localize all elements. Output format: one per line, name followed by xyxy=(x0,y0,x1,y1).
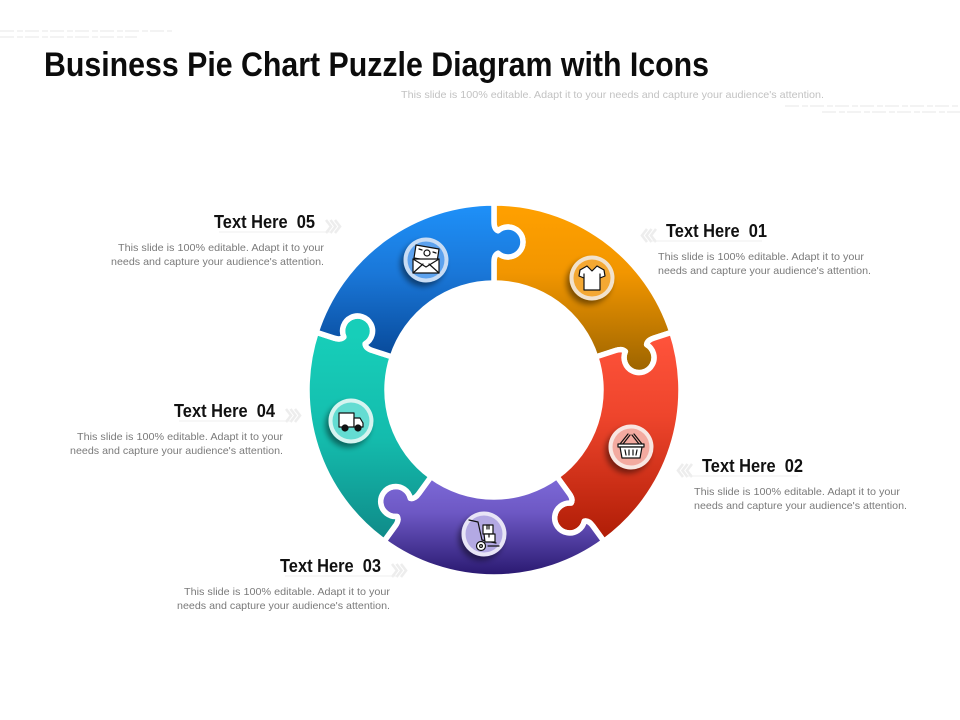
chevrons 05 xyxy=(326,220,340,233)
text block 05: needs and capture your audience's attention. xyxy=(111,256,324,268)
icon badge: t-shirt xyxy=(570,256,614,300)
chevrons 04 xyxy=(286,409,300,422)
chevrons 01 xyxy=(642,229,656,242)
text block 03: needs and capture your audience's attention. xyxy=(177,600,390,612)
puzzle piece 05 blue xyxy=(316,163,532,385)
puzzle piece 01 orange xyxy=(494,203,672,373)
text block 02: This slide is 100% editable. Adapt it to your xyxy=(694,486,901,498)
puzzle ring chart xyxy=(240,163,727,646)
text block 04: Text Here 04 xyxy=(174,401,275,421)
text block 03 xyxy=(177,556,406,612)
icon badge: delivery truck xyxy=(328,398,374,444)
icon badge: shopping basket xyxy=(608,424,654,470)
text block 04: This slide is 100% editable. Adapt it to your xyxy=(77,431,284,443)
icon badge: money envelope xyxy=(404,238,448,282)
text block 03: Text Here 03 xyxy=(280,556,381,576)
text block 05 xyxy=(111,212,340,268)
puzzle piece 02 red xyxy=(511,332,727,554)
puzzle piece 04 teal xyxy=(240,300,484,541)
title: Business Pie Chart Puzzle Diagram with Icons xyxy=(44,46,709,84)
text block 01 xyxy=(642,221,871,277)
chevrons 02 xyxy=(678,464,692,477)
text block 01: Text Here 01 xyxy=(666,221,767,241)
chevrons 03 xyxy=(392,564,406,577)
text block 02 xyxy=(678,456,907,512)
text block 04 xyxy=(70,401,300,457)
text block 05: This slide is 100% editable. Adapt it to your xyxy=(118,242,325,254)
text block 01: This slide is 100% editable. Adapt it to your xyxy=(658,251,865,263)
text block 03: This slide is 100% editable. Adapt it to your xyxy=(184,586,391,598)
decorative faint dashes xyxy=(0,31,960,112)
icon badge: hand truck with boxes xyxy=(462,512,506,556)
text block 02: needs and capture your audience's attention. xyxy=(694,500,907,512)
puzzle piece 03 purple xyxy=(360,404,604,646)
text block 01: needs and capture your audience's attention. xyxy=(658,265,871,277)
text block 04: needs and capture your audience's attention. xyxy=(70,445,283,457)
text block 05: Text Here 05 xyxy=(214,212,315,232)
subtitle: This slide is 100% editable. Adapt it to your needs and capture your audience's attention. xyxy=(401,89,824,101)
text block 02: Text Here 02 xyxy=(702,456,803,476)
